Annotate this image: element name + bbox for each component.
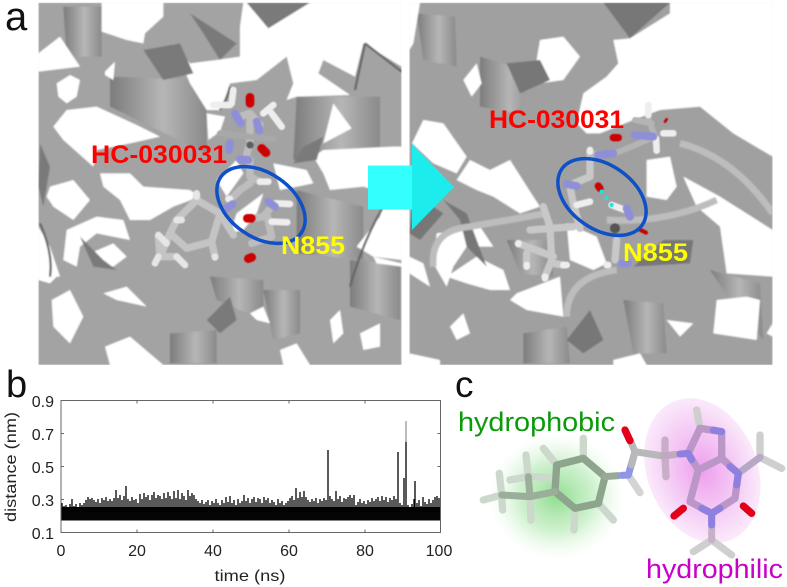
panel c label: c — [455, 364, 474, 405]
chart: distance vs time — [3, 394, 452, 585]
hydrogen bond dots — [600, 190, 614, 207]
y axis title: distance (nm) — [3, 412, 20, 522]
hydrophobic glow — [488, 433, 625, 560]
hydrogens — [483, 410, 782, 555]
x axis ticks: 60 — [280, 543, 298, 560]
carbon skeleton — [502, 428, 760, 540]
panel b label: b — [6, 364, 27, 406]
panel: protein after simulation — [409, 3, 773, 365]
molecule: HC-030031 and N855 sticks, left — [155, 90, 290, 265]
highlight ellipse left — [203, 151, 319, 259]
plot trace — [61, 421, 440, 520]
axes box — [61, 400, 440, 532]
label: N855 right: N855 — [623, 239, 688, 267]
molecule: HC-030031 and N855 sticks, right — [518, 105, 673, 278]
label: N855 left: N855 — [281, 232, 345, 260]
label: hydrophilic: hydrophilic — [646, 554, 783, 584]
x axis ticks: 0 — [57, 543, 66, 560]
x axis ticks — [57, 543, 452, 560]
label: HC-030031 right: HC-030031 — [489, 106, 624, 134]
x axis ticks: 40 — [204, 543, 222, 560]
y axis ticks: 0.1 — [32, 526, 54, 543]
y axis ticks: 0.5 — [32, 460, 54, 477]
label: HC-030031 left: HC-030031 — [91, 141, 227, 169]
x axis ticks: 100 — [426, 543, 452, 560]
x axis ticks: 80 — [356, 543, 374, 560]
y axis ticks: 0.7 — [32, 427, 54, 444]
oxygens — [625, 430, 752, 516]
x axis ticks: 20 — [128, 543, 146, 560]
y axis ticks: 0.9 — [32, 394, 54, 411]
highlight ellipse right — [544, 143, 660, 251]
arrow — [368, 144, 454, 230]
tick marks — [61, 400, 440, 532]
x axis title: time (ns) — [214, 568, 286, 585]
panel: protein before simulation — [38, 3, 402, 365]
y axis ticks — [32, 394, 54, 543]
hydrophilic glow — [623, 381, 781, 561]
label: hydrophobic: hydrophobic — [458, 407, 615, 437]
molecule: HC-030031 structure — [483, 381, 782, 561]
y axis ticks: 0.3 — [32, 493, 54, 510]
